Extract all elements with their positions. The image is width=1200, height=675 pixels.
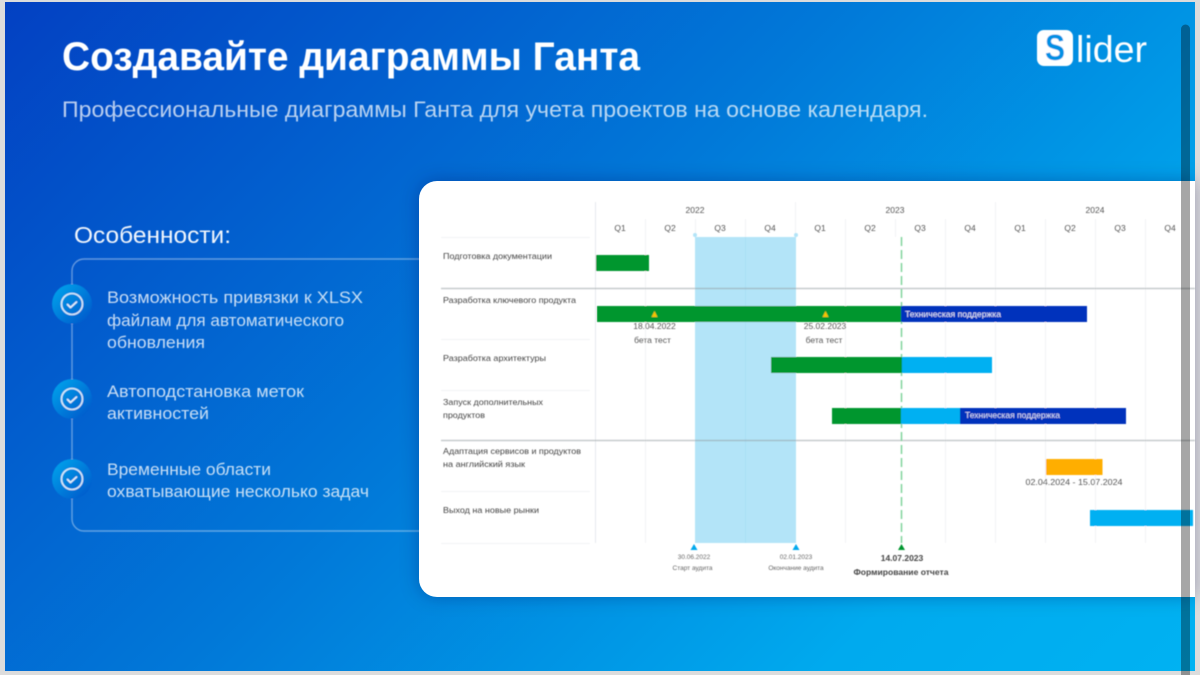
feature 1 text: файлам для автоматического — [107, 312, 344, 330]
year headers: 2023 — [886, 205, 905, 215]
gantt chart — [441, 202, 1195, 577]
marker: report — [854, 544, 949, 577]
bar: architecture — [771, 357, 992, 373]
feature 3 text — [107, 461, 369, 501]
quarter headers: Q2 — [1064, 223, 1076, 233]
subtitle: Профессиональные диаграммы Ганта для учета проектов на основе календаря. — [62, 97, 928, 122]
year headers: 2024 — [1086, 205, 1105, 215]
task labels: Адаптация сервисов и продуктов — [443, 446, 582, 456]
marker: report: 14.07.2023 — [881, 553, 924, 563]
title: Создавайте диаграммы Ганта — [62, 35, 641, 79]
bar: key product development — [597, 306, 1087, 322]
marker: audit end — [768, 544, 824, 572]
milestone: beta test 2: 25.02.2023 — [804, 321, 847, 331]
task labels: Подготовка документации — [443, 251, 552, 261]
features frame — [72, 259, 425, 531]
panel: gantt card — [419, 181, 1195, 597]
year headers: 2022 — [686, 205, 705, 215]
feature 1 text: Возможность привязки к XLSX — [107, 289, 363, 307]
quarter headers: Q1 — [814, 223, 826, 233]
feature 2 text: активностей — [107, 405, 209, 423]
bar: english localization — [1026, 459, 1123, 487]
quarter headers: Q4 — [764, 223, 776, 233]
feature 2 — [52, 379, 305, 423]
feature 3 text: Временные области — [107, 461, 271, 479]
quarter headers — [614, 223, 1176, 233]
quarter headers: Q4 — [1164, 223, 1176, 233]
task labels: на английский язык — [443, 459, 525, 469]
marker: audit start: 30.06.2022 — [678, 554, 711, 561]
feature 3 — [52, 459, 369, 501]
year headers — [686, 205, 1105, 215]
bar: additional products — [832, 408, 1126, 424]
bar: additional products: Техническая поддержка — [965, 410, 1060, 420]
feature 3 text: охватывающие несколько задач — [107, 483, 369, 501]
quarter headers: Q4 — [964, 223, 976, 233]
marker: audit start — [672, 544, 713, 572]
quarter headers: Q3 — [914, 223, 926, 233]
panel: features — [52, 222, 425, 531]
grid — [441, 202, 1146, 544]
feature 1 text — [107, 289, 363, 352]
milestone: beta test 2: бета тест — [806, 335, 842, 345]
marker: audit end: 02.01.2023 — [780, 554, 813, 561]
marker: audit end: Окончание аудита — [768, 565, 824, 572]
bar: document preparation — [596, 255, 649, 271]
task labels: Выход на новые рынки — [443, 505, 539, 515]
feature 2 text: Автоподстановка меток — [107, 383, 305, 401]
task labels: продуктов — [443, 410, 486, 420]
report date dashed line — [900, 237, 902, 543]
quarter headers: Q3 — [714, 223, 726, 233]
logo: Slider — [1037, 27, 1147, 70]
task labels: Разработка архитектуры — [443, 353, 546, 363]
icon: check badge 3 — [52, 459, 92, 499]
milestone: beta test 2 — [804, 311, 847, 345]
task labels: Разработка ключевого продукта — [443, 295, 576, 305]
feature 1 text: обновления — [107, 334, 205, 352]
milestone: beta test 1: бета тест — [634, 335, 671, 345]
marker: report: Формирование отчета — [854, 567, 949, 577]
feature 2 text — [107, 383, 305, 423]
task labels — [443, 251, 582, 515]
heading: features: Особенности: — [74, 222, 231, 248]
scrollbar overlay — [1181, 24, 1190, 675]
icon: check badge 1 — [52, 284, 92, 324]
group dividers — [441, 288, 1195, 440]
quarter headers: Q2 — [664, 223, 676, 233]
logo: Slider: lider — [1076, 29, 1147, 70]
bar: new markets — [1090, 510, 1193, 526]
quarter headers: Q3 — [1114, 223, 1126, 233]
quarter headers: Q1 — [1014, 223, 1026, 233]
audit time band — [693, 233, 798, 543]
bar: english localization: 02.04.2024 - 15.07.2024 — [1026, 477, 1123, 487]
icon: check badge 2 — [52, 379, 92, 419]
bar: key product development: Техническая поддержка — [905, 309, 1001, 319]
quarter headers: Q2 — [864, 223, 876, 233]
logo: Slider: S — [1045, 27, 1065, 68]
marker: audit start: Старт аудита — [672, 565, 713, 572]
milestone: beta test 1: 18.04.2022 — [633, 321, 676, 331]
quarter headers: Q1 — [614, 223, 626, 233]
milestone: beta test 1 — [633, 311, 676, 345]
task labels: Запуск дополнительных — [443, 397, 544, 407]
feature 1 — [52, 284, 363, 352]
